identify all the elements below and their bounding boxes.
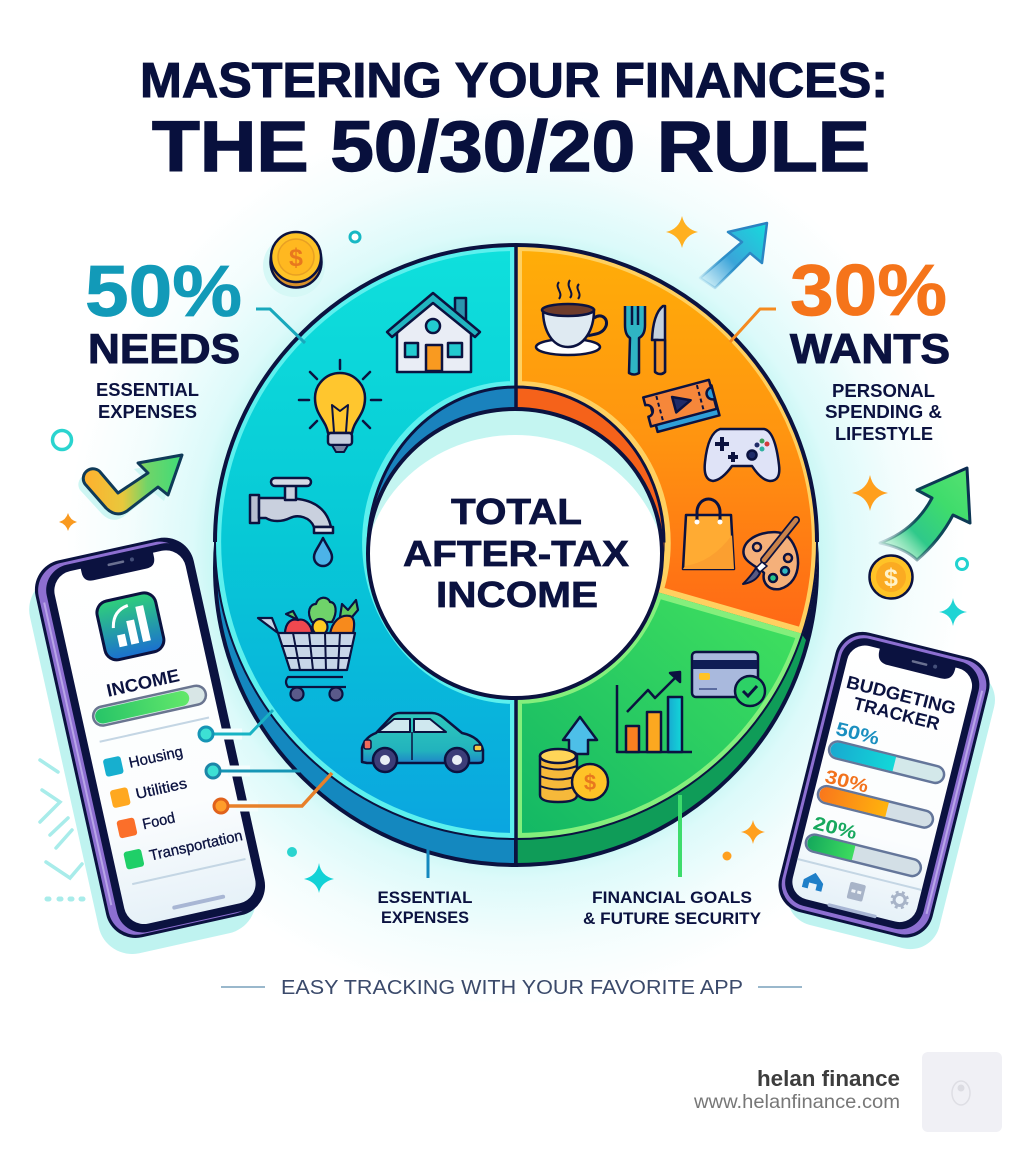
tracker heading — [840, 672, 958, 737]
slice: wants 30% — [516, 245, 818, 634]
left phone notch — [79, 547, 156, 582]
icon: paint palette — [743, 520, 798, 589]
tracker bar 30%: 30% — [823, 767, 871, 798]
arrow: left swoosh — [78, 455, 182, 520]
connector: utilities — [206, 764, 300, 778]
category: utilities: Utilities — [134, 775, 189, 803]
tracker heading: TRACKER — [851, 693, 942, 734]
center label: INCOME — [436, 574, 598, 615]
icon: faucet — [250, 478, 333, 566]
icon: left ring — [52, 430, 72, 450]
category: housing — [103, 742, 185, 777]
icon: teal dot bottom — [287, 847, 297, 857]
label: 50% needs — [85, 252, 242, 422]
label: 30% wants: 30% — [790, 251, 947, 331]
leader line: wants — [730, 309, 776, 342]
title: MASTERING YOUR FINANCES: — [140, 54, 888, 108]
icon: ticket — [643, 380, 719, 433]
nav icon: settings — [890, 890, 909, 910]
label: 50% needs: NEEDS — [88, 325, 240, 372]
icon: fork and knife — [625, 306, 665, 374]
icon: small teal ring right — [956, 558, 968, 570]
icon: top coin stack — [263, 232, 325, 297]
center label: AFTER-TAX — [403, 533, 630, 574]
icon: credit card — [692, 652, 765, 706]
icon: car — [362, 713, 483, 772]
connector: housing — [199, 710, 273, 741]
tracker bar 50%: 50% — [834, 719, 881, 750]
right phone notch — [876, 644, 957, 681]
nav icon: home — [802, 870, 825, 892]
icon: right coin: $ — [884, 564, 898, 592]
slice: savings 20% — [516, 592, 803, 839]
icon: orange star bottom — [741, 820, 765, 844]
tracker bar 30% — [816, 766, 939, 829]
right phone screen — [789, 642, 976, 926]
category: food: Food — [141, 809, 177, 833]
phone: left income app — [19, 532, 274, 961]
icon: teal star bottom — [304, 863, 334, 893]
label: essential expenses — [378, 888, 472, 927]
app icon — [95, 591, 166, 662]
icon: top coin stack: $ — [289, 244, 303, 272]
icon: shopping bag — [683, 499, 734, 569]
icon: light bulb — [299, 360, 381, 452]
icon: coin stack with arrow — [540, 717, 608, 802]
category: housing: Housing — [127, 743, 185, 772]
brand text: helan finance — [757, 1066, 900, 1091]
label: financial goals: & FUTURE SECURITY — [583, 909, 762, 928]
donut chart — [215, 245, 818, 866]
title: THE 50/30/20 RULE — [152, 108, 870, 187]
leader line: financial goals — [678, 795, 682, 877]
phone: right budgeting tracker — [770, 626, 1004, 955]
title — [140, 54, 888, 187]
income progress bar — [91, 684, 208, 727]
label: 30% wants: WANTS — [790, 325, 950, 372]
category: transportation: Transportation — [148, 827, 244, 864]
label: 50% needs: 50% — [85, 252, 242, 332]
icon: right coin — [870, 556, 912, 598]
tracker bar 50% — [827, 718, 951, 785]
center label: TOTAL — [451, 491, 582, 532]
icon: small ring top — [350, 232, 360, 242]
icon: right orange star — [852, 475, 888, 511]
label: financial goals — [583, 888, 762, 928]
label: 30% wants: SPENDING & — [825, 402, 942, 422]
center label — [403, 491, 630, 615]
tracker bar 20% — [804, 812, 928, 878]
label: 30% wants: LIFESTYLE — [835, 424, 933, 444]
label: 50% needs: EXPENSES — [98, 402, 197, 422]
left phone screen — [50, 546, 259, 928]
slice: needs 50% — [215, 245, 516, 839]
icon: teal star right — [939, 598, 967, 626]
label: 30% wants: PERSONAL — [832, 381, 935, 401]
label: essential expenses: ESSENTIAL — [378, 888, 472, 907]
label: 50% needs: ESSENTIAL — [96, 380, 199, 400]
icon: game controller — [705, 429, 779, 481]
brand text: www.helanfinance.com — [693, 1091, 900, 1113]
arrow: right green — [880, 468, 970, 560]
icon: orange dot bottom — [722, 852, 732, 860]
icon: orange star top — [666, 216, 698, 248]
brand text — [693, 1066, 900, 1113]
decoration: left chevrons — [40, 760, 83, 899]
label: financial goals: FINANCIAL GOALS — [592, 888, 752, 907]
category: transportation — [123, 826, 244, 870]
nav icon: calendar — [847, 882, 866, 902]
tracker bar 20%: 20% — [811, 813, 859, 844]
tracker heading: BUDGETING — [844, 672, 958, 719]
icon: shopping cart — [258, 598, 358, 700]
arrow: top blue — [700, 223, 767, 288]
leader line: essential expenses — [426, 843, 430, 878]
category: food — [116, 809, 177, 839]
icon: coin stack with arrow: $ — [584, 770, 596, 795]
center hole with inner wall — [364, 387, 666, 715]
category: utilities — [109, 774, 189, 808]
caption: EASY TRACKING WITH YOUR FAVORITE APP — [281, 977, 743, 999]
donut side wall — [215, 271, 817, 865]
income heading: INCOME — [105, 665, 181, 701]
brand logo — [922, 1052, 1002, 1132]
icon: left orange star — [59, 513, 77, 531]
icon: house — [387, 293, 480, 372]
label: essential expenses: EXPENSES — [381, 908, 469, 927]
icon: coffee cup — [536, 280, 607, 355]
connector: food — [214, 773, 332, 813]
icon: growth bar chart — [617, 672, 692, 752]
label: 30% wants — [790, 251, 950, 444]
leader line: needs — [256, 309, 305, 343]
